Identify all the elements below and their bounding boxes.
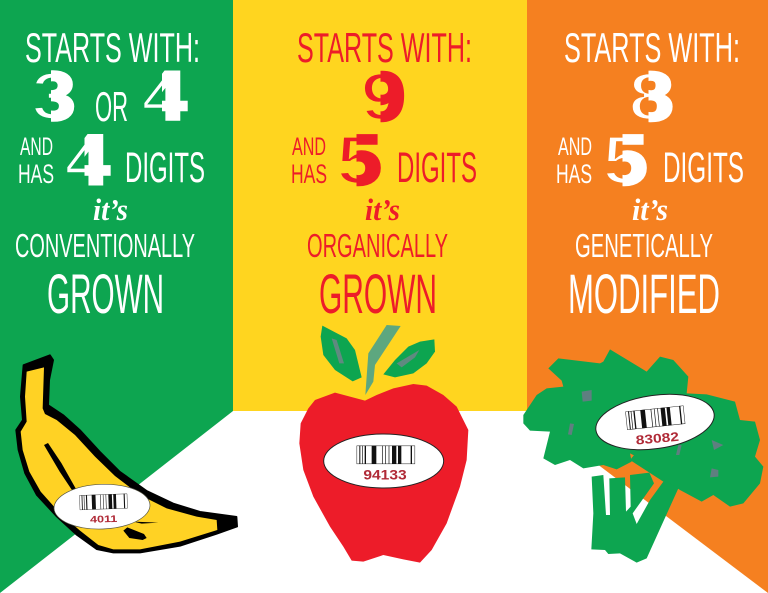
panel text: organically grown: GROWN xyxy=(319,262,437,325)
panel text: genetically modified: it’s xyxy=(632,192,668,227)
panel text: conventionally grown: 4 xyxy=(64,121,109,199)
panel text: conventionally grown: AND xyxy=(20,133,53,161)
panel text: organically grown: STARTS WITH: xyxy=(297,24,472,71)
panel text: conventionally grown: STARTS WITH: xyxy=(25,24,200,71)
panel text: genetically modified: HAS xyxy=(556,159,592,189)
panel: yellow background xyxy=(233,0,527,593)
panel text: conventionally grown: GROWN xyxy=(47,262,164,325)
panel text: organically grown: DIGITS xyxy=(397,144,477,192)
panel: green background xyxy=(0,0,233,593)
panel text: conventionally grown: it’s xyxy=(93,192,128,227)
panel text: genetically modified: 5 xyxy=(602,121,647,199)
panel text: organically grown: 5 xyxy=(336,121,381,199)
panel text: conventionally grown: DIGITS xyxy=(125,144,205,192)
panel text: organically grown: AND xyxy=(292,133,326,161)
illustration: banana with sticker xyxy=(16,355,237,553)
panel text: conventionally grown: CONVENTIONALLY xyxy=(15,227,195,264)
white table surface xyxy=(0,411,768,593)
panel text: conventionally grown xyxy=(15,24,205,325)
illustration: broccoli with sticker: 83082 xyxy=(635,430,680,448)
panel text: genetically modified xyxy=(556,24,744,325)
panel text: conventionally grown: 3 xyxy=(31,58,75,134)
panel: orange background xyxy=(527,0,768,593)
panel text: organically grown: ORGANICALLY xyxy=(307,227,448,264)
panel text: organically grown: it’s xyxy=(365,192,400,227)
illustration: broccoli with sticker xyxy=(523,349,763,563)
panel text: conventionally grown: OR xyxy=(95,83,128,130)
panel text: organically grown: 9 xyxy=(360,59,405,135)
panel text: organically grown xyxy=(291,24,477,325)
panel text: genetically modified: 8 xyxy=(628,59,673,135)
illustration: apple with sticker: 94133 xyxy=(363,466,407,482)
illustration: apple with sticker xyxy=(299,325,468,563)
panel text: organically grown: HAS xyxy=(291,159,327,189)
panel text: conventionally grown: 4 xyxy=(141,58,186,134)
panel text: genetically modified: AND xyxy=(558,133,592,161)
illustration: banana with sticker: 4011 xyxy=(90,514,118,526)
panel text: conventionally grown: HAS xyxy=(18,159,54,189)
